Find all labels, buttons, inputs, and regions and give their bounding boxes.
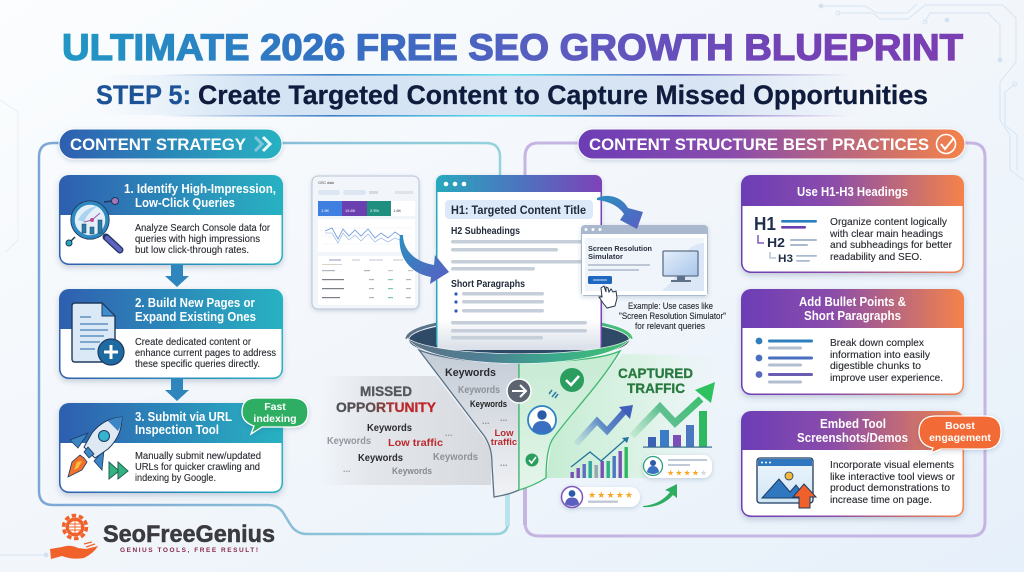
icon: gear with globe and hand [50,516,98,559]
step card 2: build pages: enhance current pages to address [135,347,276,359]
step card 1: identify queries: 1. Identify High-Impression, [124,182,276,196]
icon: arrow circle [507,379,531,403]
practice card 2: bullet points: improve user experience. [830,372,943,384]
missed opportunity panel: Keywords [367,423,412,434]
icon: rocket [68,417,122,477]
icon: user avatar [528,406,556,434]
practice card 2: bullet points [741,289,964,395]
callout: boost engagement: engagement [929,432,991,444]
arrow: green growth [632,399,701,436]
callout: boost engagement: Boost [945,420,975,432]
screen resolution simulator mockup [581,225,708,308]
heading pill: content strategy: CONTENT STRATEGY [70,136,246,154]
content page mockup: H2 Subheadings [451,226,520,237]
KPI tiles: 1.8K [393,208,402,213]
missed opportunity panel: ... [343,464,351,474]
funnel: rim [407,338,631,364]
step card 3: submit via URL inspection: URLs for quicker crawling and [135,461,260,473]
review card: four stars: ★★★★ [667,468,699,478]
arrow: green curved [643,484,677,507]
funnel keywords: traffic [491,437,517,448]
missed opportunity panel: ... [445,428,453,438]
callout: boost engagement [919,416,1001,453]
missed opportunity panel: Low traffic [388,437,443,449]
practice card 3: embed screenshots: Embed Tool [820,417,886,431]
icon: small marks [549,390,558,398]
practice card 1: headings: Organize content logically [830,216,948,228]
captured traffic heading: CAPTURED [618,365,693,381]
practice card 3: embed screenshots: increase time on page. [830,494,932,506]
funnel keywords: Keywords [458,385,500,396]
funnel keywords: ... [500,413,508,423]
callout: fast indexing: indexing [253,413,297,425]
heading pill: content strategy [59,129,282,159]
content page mockup: Short Paragraphs [451,279,525,290]
icon: heading hierarchy: H3 [778,253,793,265]
icon: check large [560,368,584,392]
practice card 3: embed screenshots: product demonstrations to [830,482,950,494]
arrow: page to simulator [597,196,643,229]
practice card 1: headings: Use H1-H3 Headings [797,185,908,199]
icon: heading hierarchy [754,214,817,265]
missed opportunity panel [320,376,491,485]
funnel keywords: Keywords [470,399,507,410]
example caption [619,301,726,331]
missed opportunity panel: MISSED [360,384,412,399]
missed opportunity panel: Keywords [433,452,478,463]
funnel keywords: Keywords [445,367,496,379]
data table [318,256,415,305]
funnel [407,338,631,497]
subtitle band: Create Targeted Content to Capture Missed Opportunities [198,80,928,110]
funnel: missed side [419,350,519,497]
bar chart: large [643,411,712,448]
subtitle band: STEP 5: [96,80,191,110]
review card: four stars [643,455,712,478]
callout: fast indexing: Fast [264,401,286,413]
line chart [318,219,415,252]
funnel keywords: ... [482,416,490,426]
bar chart: small with trend line [570,437,629,478]
KPI tiles [318,201,415,216]
step card 2: build pages: Expand Existing Ones [135,310,256,324]
step card 3: submit via URL inspection [59,403,283,493]
logo: SeoFreeGenius: GENIUS TOOLS, FREE RESULT! [120,547,258,554]
captured traffic panel background [546,354,722,478]
icon: green fast-forward [109,462,128,479]
content page mockup: H1: Targeted Content Title [451,203,586,217]
practice card 2: bullet points: Add Bullet Points & [799,295,906,309]
arrow: dashboard to page [400,235,449,284]
missed opportunity panel: OPPORTUNITY [336,400,436,415]
missed opportunity panel: Keywords [392,466,432,476]
KPI tiles: 15.8K [345,208,356,213]
step card 1: identify queries: Low-Click Queries [135,196,235,210]
practice card 2: bullet points: digestible chunks to [830,360,921,372]
icon: document with plus [72,303,124,365]
content page mockup [436,175,602,350]
heading pill: content structure best practices [578,129,965,159]
icon: monitor [663,251,698,282]
funnel keywords: Low [494,428,514,439]
KPI tiles: 1.5K [321,208,330,213]
example caption: for relevant queries [635,321,705,331]
icon: check small [526,454,538,466]
captured traffic heading [618,365,693,396]
title: ULTIMATE 2026 FREE SEO GROWTH BLUEPRINT [62,27,963,68]
practice card 2: bullet points: Short Paragraphs [804,309,901,323]
icon: image window with upload arrow [757,458,816,508]
practice card 2: bullet points: information into easily [830,349,931,361]
callout: fast indexing [242,398,308,434]
funnel keywords: ... [500,458,508,468]
arrow: blue growth [576,412,624,444]
under-funnel panel edges [505,485,527,526]
funnel: captured side [519,351,620,490]
practice card 3: embed screenshots: like interactive tool views or [830,471,955,483]
KPI tiles: 2.5% [370,208,380,213]
step card 3: submit via URL inspection: indexing by Google. [135,472,216,484]
icon: hand cursor [599,286,617,308]
screen resolution simulator mockup: Screen Resolution [588,244,652,253]
step card 2: build pages: 2. Build New Pages or [135,296,255,310]
panel: content structure outline [525,143,985,536]
step card 3: submit via URL inspection: Inspection Tool [135,423,219,437]
funnel rim back and interior [407,317,631,360]
step card 1: identify queries [59,175,283,265]
arrow: step 1 to step 2 [165,265,189,287]
missed opportunity panel: Keywords [358,453,403,464]
logo: SeoFreeGenius: SeoFreeGenius [103,521,275,548]
step card 1: identify queries: Analyze Search Console data for [135,222,270,234]
practice card 3: embed screenshots: Screenshots/Demos [797,431,908,445]
step card 1: identify queries: queries with high impressions [135,233,260,245]
icon: heading hierarchy: H2 [767,235,785,250]
growth arrows [576,382,715,444]
step card 2: build pages [59,289,283,379]
arrow: step 2 to step 3 [165,379,189,401]
practice card 1: headings: readability and SEO. [830,251,922,263]
icon: heading hierarchy: H1 [754,214,776,234]
example caption: "Screen Resolution Simulator" [619,311,726,321]
icon: magnifier with chart [66,198,120,250]
practice card 1: headings: and subheadings for better [830,239,952,251]
practice card 1: headings [741,175,964,273]
example caption: Example: Use cases like [628,301,713,311]
subtitle band [96,74,928,117]
icon: bullet list [756,338,813,384]
practice card 1: headings: with clear main headings [829,228,943,240]
step card 2: build pages: Create dedicated content or [135,336,251,348]
step card 3: submit via URL inspection: 3. Submit via URL [135,410,232,424]
captured traffic heading: TRAFFIC [627,380,685,396]
missed opportunity panel: Keywords [327,436,371,447]
review card: four stars: ★ [700,468,707,478]
step card 2: build pages: these specific queries directly. [135,358,260,370]
review card: five stars [562,486,640,508]
GSC dashboard screenshot [312,176,419,309]
funnel keywords [445,367,517,468]
heading pill: content structure best practices: CONTENT STRUCTURE BEST PRACTICES [589,136,929,154]
GSC dashboard screenshot: GSC data [318,180,335,185]
review card: five stars: ★★★★★ [588,491,633,501]
practice card 3: embed screenshots: Incorporate visual elements [830,459,954,471]
panel: content strategy outline [39,143,508,534]
screen resolution simulator mockup: Simulator [588,252,623,261]
practice card 2: bullet points: Break down complex [830,337,925,349]
practice card 3: embed screenshots [741,411,964,517]
logo: SeoFreeGenius [50,516,275,559]
step card 3: submit via URL inspection: Manually submit new/updated [135,450,261,462]
step card 1: identify queries: but low click-through rates. [135,244,249,256]
